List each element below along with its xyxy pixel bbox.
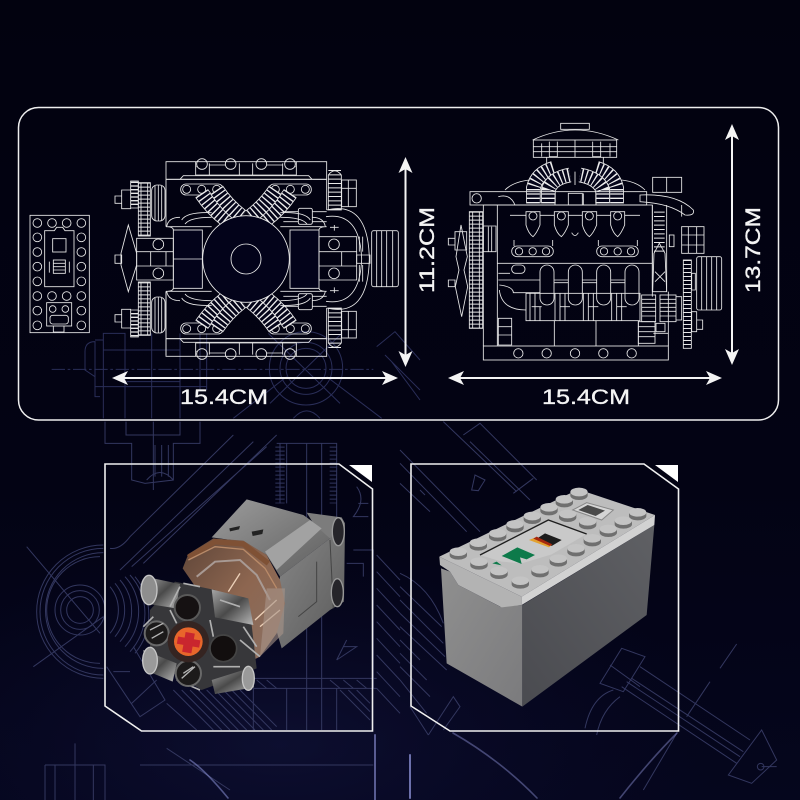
panel: battery frame xyxy=(411,464,678,731)
motor housing xyxy=(212,499,345,648)
top view of engine xyxy=(115,159,398,359)
dimension arrow: height, side view xyxy=(725,124,739,365)
air filter cap xyxy=(533,123,618,168)
label: width side view: 15.4CM xyxy=(542,386,630,409)
blueprint background: behind dimension panel xyxy=(52,332,420,418)
intake hoses xyxy=(505,168,645,203)
label: width top view: 15.4CM xyxy=(180,386,268,409)
rail and block xyxy=(470,177,694,346)
motor illustration xyxy=(141,499,345,694)
lower tubes xyxy=(497,263,652,321)
dimension arrow: height, top view xyxy=(398,157,412,367)
orange and black port xyxy=(529,533,562,547)
studs xyxy=(450,488,646,589)
battery right side xyxy=(522,525,654,707)
battery top plate xyxy=(439,489,655,607)
right accessories xyxy=(638,205,722,348)
dimension arrow: width, top view xyxy=(112,371,398,385)
side view of engine xyxy=(448,123,722,360)
left timing gear xyxy=(448,212,496,328)
label: height side view: 13.7CM xyxy=(742,207,765,293)
bottom light streaks xyxy=(190,733,677,800)
spark plugs xyxy=(510,212,640,237)
motor head with cylinders xyxy=(141,575,260,694)
manifolds xyxy=(512,240,638,257)
base with circles xyxy=(483,292,668,360)
copper coil section xyxy=(183,538,285,663)
green switch window xyxy=(492,547,535,565)
battery left side xyxy=(441,568,522,707)
dimension arrow: width, side view xyxy=(448,371,722,385)
label: height top view: 11.2CM xyxy=(416,207,439,293)
battery box plan xyxy=(30,215,89,333)
panel: dimensions frame xyxy=(18,108,778,420)
blueprint background: lower centre and right xyxy=(400,422,777,790)
USB port xyxy=(573,503,613,520)
panel: motor frame xyxy=(105,464,372,731)
battery box illustration xyxy=(439,488,655,707)
blueprint background: left xyxy=(27,422,400,800)
